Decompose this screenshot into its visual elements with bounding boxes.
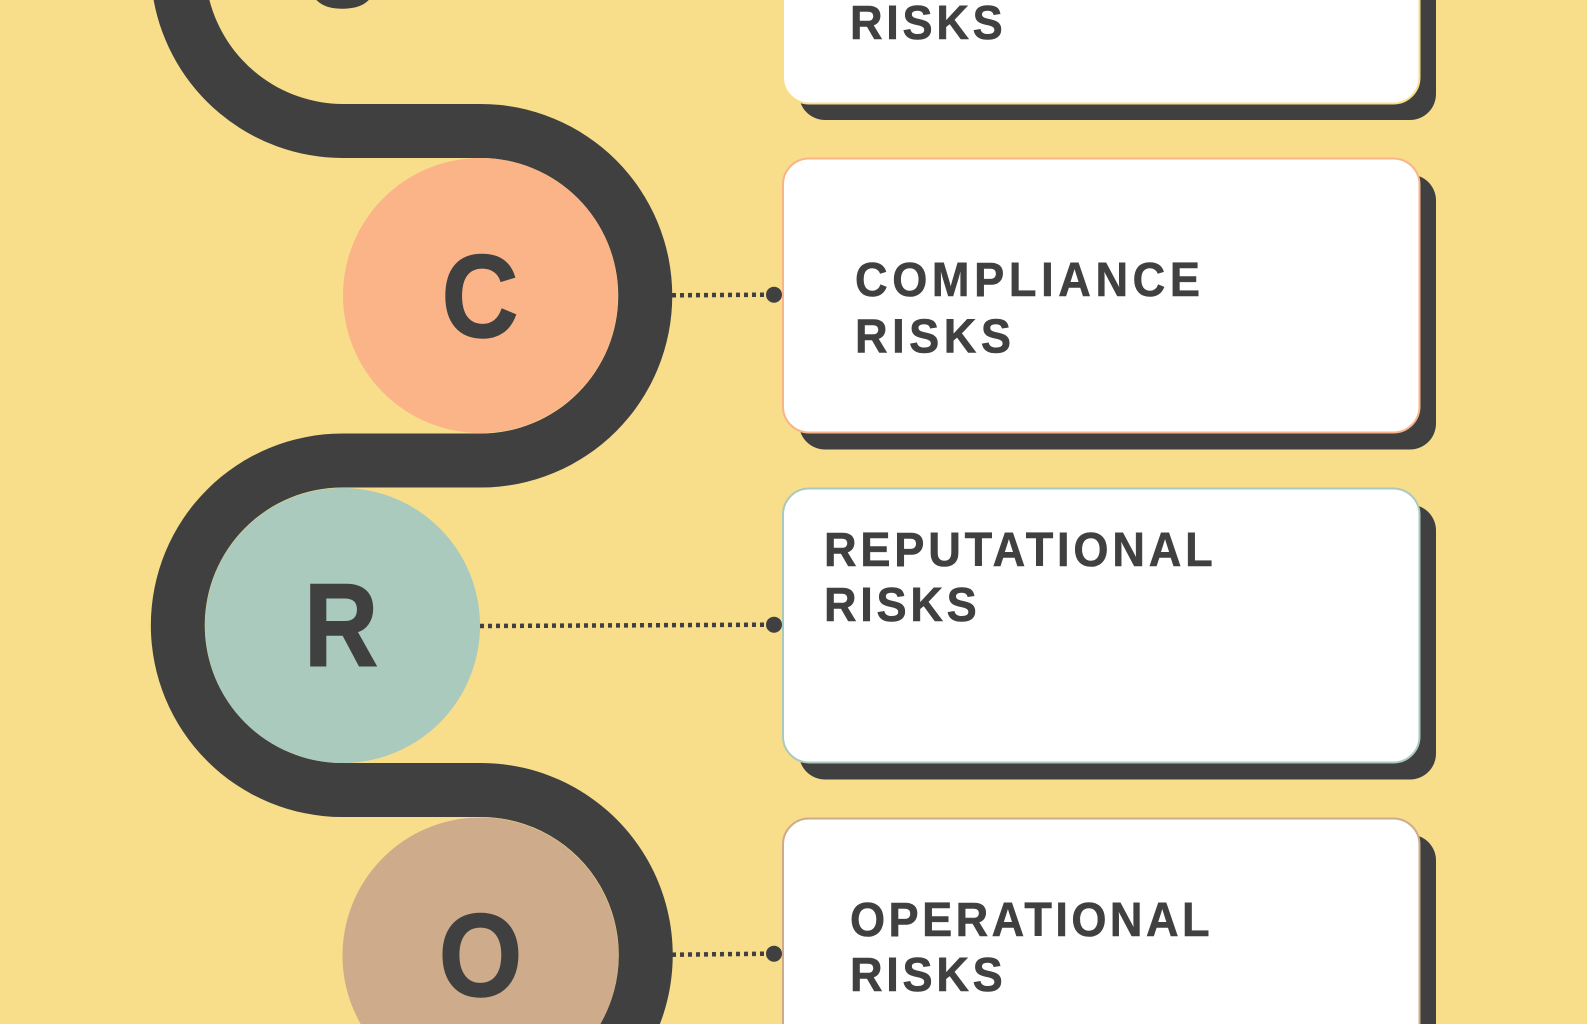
winding road path	[151, 0, 673, 1024]
panel: compliance risks card: COMPLIANCE	[855, 253, 1200, 306]
step O: letter badge, partly cropped	[342, 818, 618, 1024]
panel: first risk card, cropped at top	[783, 0, 1436, 120]
connector: reputational	[480, 617, 782, 633]
panel: reputational risks card: RISKS	[824, 578, 977, 631]
connector: compliance	[672, 287, 782, 303]
step R: letter badge: R	[304, 560, 378, 692]
panel: operational risks card, cropped at bottom: RISKS	[850, 948, 1003, 1001]
panel: reputational risks card	[783, 488, 1436, 780]
panel: operational risks card, cropped at bottom: OPERATIONAL	[850, 893, 1210, 946]
connector: operational	[672, 946, 782, 962]
step C: letter badge: C	[442, 230, 518, 362]
step C: letter badge	[343, 158, 618, 433]
panel: compliance risks card	[783, 158, 1436, 450]
panel: compliance risks card: RISKS	[855, 309, 1011, 363]
panel: operational risks card, cropped at bottom	[783, 818, 1436, 1024]
step R: letter badge	[205, 488, 480, 763]
panel: reputational risks card: REPUTATIONAL	[824, 523, 1213, 576]
step O: letter badge, partly cropped: O	[439, 889, 522, 1021]
